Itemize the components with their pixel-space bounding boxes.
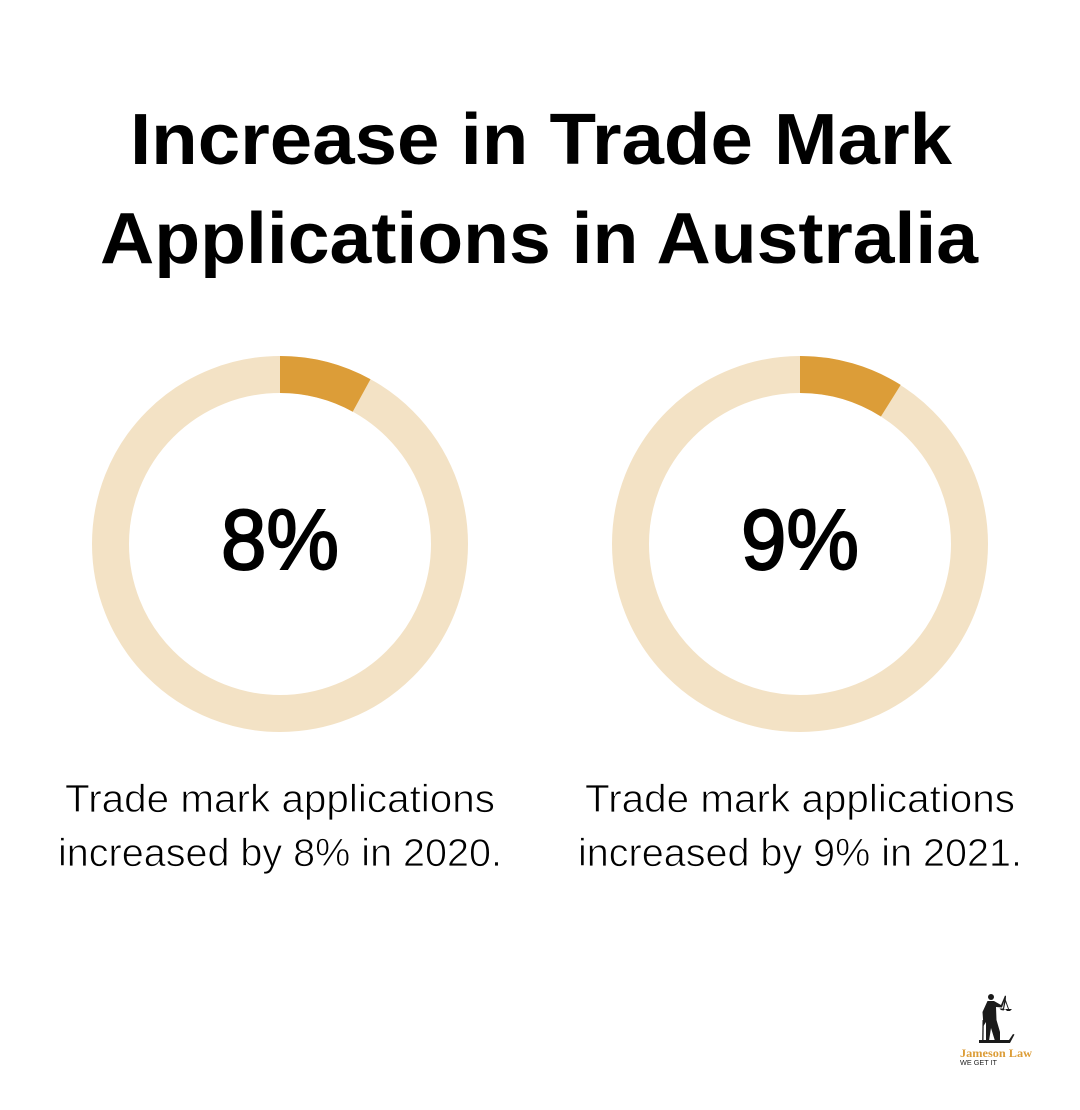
percentage: 9%: 9%: [741, 493, 859, 588]
brand name: Jameson Law: [960, 1048, 1033, 1060]
caption: 2020: Trade mark applications: [65, 778, 495, 821]
caption: 2021: increased by 9% in 2021.: [578, 832, 1022, 875]
donut chart: 9%: [630, 356, 970, 714]
panel: 2020 statistic: [58, 356, 502, 875]
caption: 2021: Trade mark applications: [585, 778, 1015, 821]
caption: 2020: [58, 778, 502, 875]
percentage: 8%: 8%: [221, 493, 339, 588]
caption: 2020: increased by 8% in 2020.: [58, 832, 502, 875]
title: Increase in Trade Mark: [130, 100, 953, 180]
title: [100, 100, 979, 279]
icon: lady justice: [979, 994, 1014, 1043]
tagline: WE GET IT: [960, 1058, 997, 1067]
donut chart: 8%: [110, 356, 450, 714]
panel: 2021 statistic: [578, 356, 1022, 875]
caption: 2021: [578, 778, 1022, 875]
title: Applications in Australia: [100, 199, 979, 279]
logo: Jameson Law: [960, 994, 1033, 1067]
